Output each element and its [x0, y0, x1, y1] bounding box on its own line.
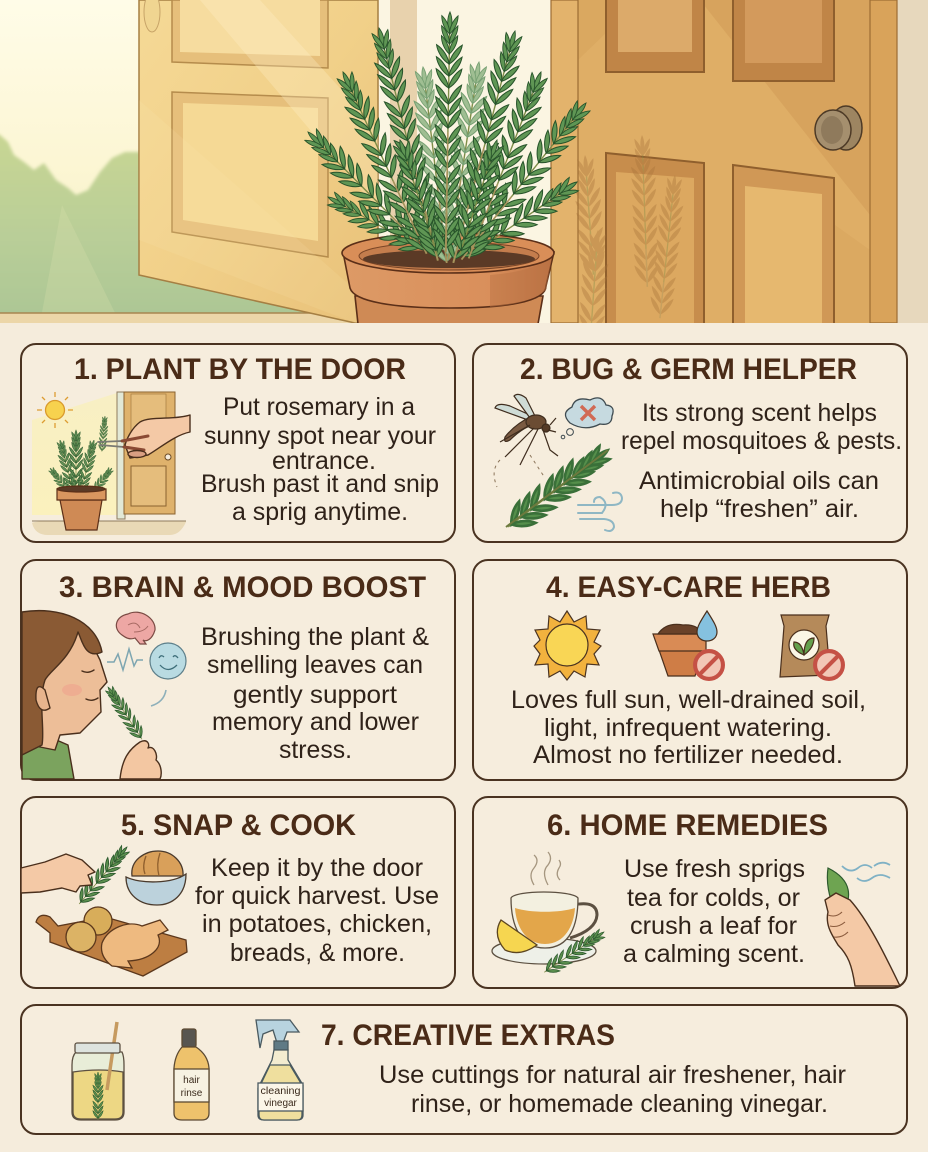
body text: Keep it by the door: [211, 854, 423, 882]
body text: help “freshen” air.: [660, 495, 859, 523]
hand: [120, 741, 161, 779]
bowl of bread: [126, 851, 186, 905]
terracotta pot: [342, 233, 554, 324]
illustration: tea cup with lemon and rosemary: [492, 852, 609, 980]
body text: a calming scent.: [623, 940, 805, 968]
body text: Use cuttings for natural air freshener, hair: [379, 1061, 846, 1089]
card 6: home remedies: [473, 797, 907, 988]
pulse line: [107, 649, 143, 670]
icon: cleaning vinegar spray bottle: [256, 1020, 303, 1120]
body text: entrance.: [272, 447, 376, 475]
outdoor garden with sunlight: [0, 0, 304, 312]
open left door: [139, 0, 378, 323]
pale back sprigs: [414, 61, 488, 263]
illustration: mosquito, cloud, rosemary sprig, air: [494, 394, 622, 539]
illustration: woman smelling rosemary: [22, 611, 186, 779]
heading: 4. EASY-CARE HERB: [546, 571, 831, 604]
small rosemary plant: [46, 416, 116, 505]
heading: 2. BUG & GERM HELPER: [520, 353, 857, 386]
icon: brain: [116, 612, 155, 644]
body text: Antimicrobial oils can: [639, 467, 879, 495]
illustration: harvest and cooking: [21, 841, 187, 976]
body text: tea for colds, or: [627, 884, 800, 912]
body text: rinse, or homemade cleaning vinegar.: [411, 1090, 828, 1118]
no-sign: [695, 651, 723, 679]
rosemary plant in hero: [297, 12, 598, 269]
heading: 5. SNAP & COOK: [121, 809, 356, 842]
body text: Brushing the plant &: [201, 623, 429, 651]
icon: hair rinse bottle: rinse: [181, 1088, 203, 1099]
icon: sun: [37, 392, 73, 428]
rosemary sprig in hand: [102, 683, 148, 744]
heading: 6. HOME REMEDIES: [547, 809, 828, 842]
body text: in potatoes, chicken,: [202, 910, 432, 938]
body text: Put rosemary in a: [223, 393, 415, 421]
green sprigs: [297, 12, 598, 269]
icon: jar with rosemary infusion: [72, 1022, 124, 1120]
body text: [379, 1061, 846, 1118]
heading: 3. BRAIN & MOOD BOOST: [59, 571, 426, 604]
card 7: creative extras: [21, 1005, 907, 1134]
icon: smiling face: [150, 643, 186, 679]
woman portrait: [22, 611, 107, 779]
body text: gently support: [233, 681, 397, 709]
body text: crush a leaf for: [630, 912, 797, 940]
icon: no-germ thought cloud: [561, 398, 613, 439]
cutting board with potatoes and chicken: [36, 907, 187, 976]
body text: a sprig anytime.: [232, 498, 408, 526]
body text: Use fresh sprigs: [624, 855, 805, 883]
heading: 1. PLANT BY THE DOOR: [74, 353, 406, 386]
icon: fertilizer bag: [780, 615, 843, 679]
body text: for quick harvest. Use: [195, 882, 439, 910]
icon: hair rinse bottle: hair: [183, 1075, 201, 1086]
icon: full sun: [534, 611, 601, 680]
rosemary sprig: [499, 438, 618, 539]
body text: light, infrequent watering.: [544, 714, 832, 742]
illustration: hand crushing a leaf: [825, 863, 900, 986]
body text: [195, 854, 439, 967]
body text: sunny spot near your: [204, 422, 436, 450]
card 5: snap and cook: [21, 797, 455, 988]
body text: [623, 855, 805, 968]
body text: [201, 393, 439, 526]
small pot: [57, 486, 106, 530]
hand with scissors: [98, 415, 190, 458]
body text: repel mosquitoes & pests.: [621, 427, 902, 455]
card 3: brain and mood boost: [21, 560, 455, 780]
body text: [511, 686, 866, 769]
closed right door with panels and knob: [551, 0, 897, 351]
body text: Almost no fertilizer needed.: [533, 741, 843, 769]
body text: [201, 623, 429, 764]
icon: pot with soil and water drop: [653, 611, 723, 679]
plant shadow on door: [574, 136, 683, 323]
no-sign: [815, 651, 843, 679]
hand picking rosemary: [21, 841, 134, 910]
heading: 7. CREATIVE EXTRAS: [321, 1019, 615, 1052]
card 4: easy-care herb: [473, 560, 907, 780]
body text: [621, 399, 902, 523]
body text: Loves full sun, well-drained soil,: [511, 686, 866, 714]
body text: breads, & more.: [230, 939, 405, 967]
icon: hair rinse bottle: [174, 1029, 209, 1120]
body text: Its strong scent helps: [642, 399, 877, 427]
body text: stress.: [279, 736, 352, 764]
body text: Brush past it and snip: [201, 470, 439, 498]
icon: cleaning vinegar spray bottle: cleaning: [260, 1086, 300, 1097]
body text: memory and lower: [212, 708, 419, 736]
icon: cleaning vinegar spray bottle: vinegar: [264, 1098, 298, 1109]
card 2: bug and germ helper: [473, 344, 907, 542]
door knob: [815, 106, 862, 150]
hero illustration: rosemary pot by open door: [0, 0, 928, 351]
card 1: plant by the door: [21, 344, 455, 542]
illustration: snipping rosemary at the door: [32, 392, 190, 535]
body text: smelling leaves can: [207, 651, 423, 679]
icon: mosquito: [495, 394, 558, 465]
icon: wind swirls: [578, 493, 622, 531]
door frame and wall: [0, 0, 928, 323]
